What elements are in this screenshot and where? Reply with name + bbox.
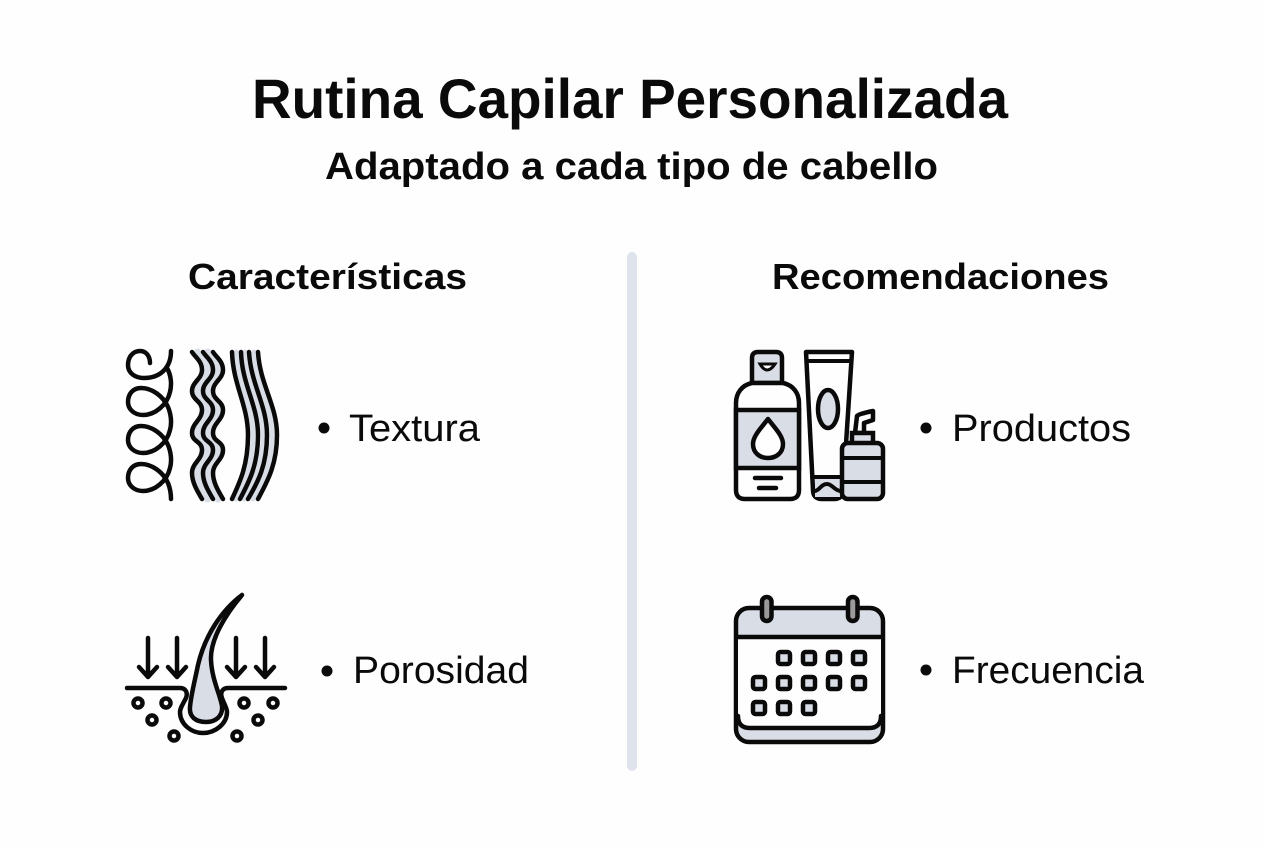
- calendar body: [736, 608, 883, 742]
- arrows: [139, 638, 274, 677]
- heading: características: Características: [188, 256, 467, 297]
- icon: hair follicle porosity: [127, 595, 285, 740]
- tube: [806, 352, 852, 499]
- curly strand: [128, 351, 171, 499]
- label: porosidad: Porosidad: [353, 650, 529, 692]
- bottle cap: [752, 352, 782, 383]
- pump bottle: [855, 411, 873, 433]
- straight strands: [232, 352, 277, 499]
- wavy strands: [192, 352, 223, 499]
- heading: recomendaciones: Recomendaciones: [772, 256, 1109, 297]
- icon: hair textures: [128, 351, 277, 499]
- title: Rutina Capilar Personalizada: [252, 67, 1009, 130]
- bottle label: [736, 410, 799, 468]
- droplet: [753, 419, 783, 458]
- label: frecuencia: Frecuencia: [952, 650, 1145, 692]
- skin line: [127, 688, 285, 733]
- subtitle: Adaptado a cada tipo de cabello: [325, 146, 938, 188]
- label: textura: Textura: [349, 408, 481, 450]
- binding rings: [762, 597, 772, 621]
- pores: [134, 698, 278, 740]
- hair shaft: [190, 595, 242, 722]
- central divider: [627, 252, 637, 771]
- icon: calendar: [736, 597, 883, 742]
- icon: hair products: [736, 352, 883, 499]
- bottle body: [736, 383, 799, 499]
- label: productos: Productos: [952, 408, 1131, 450]
- day squares: [753, 652, 865, 714]
